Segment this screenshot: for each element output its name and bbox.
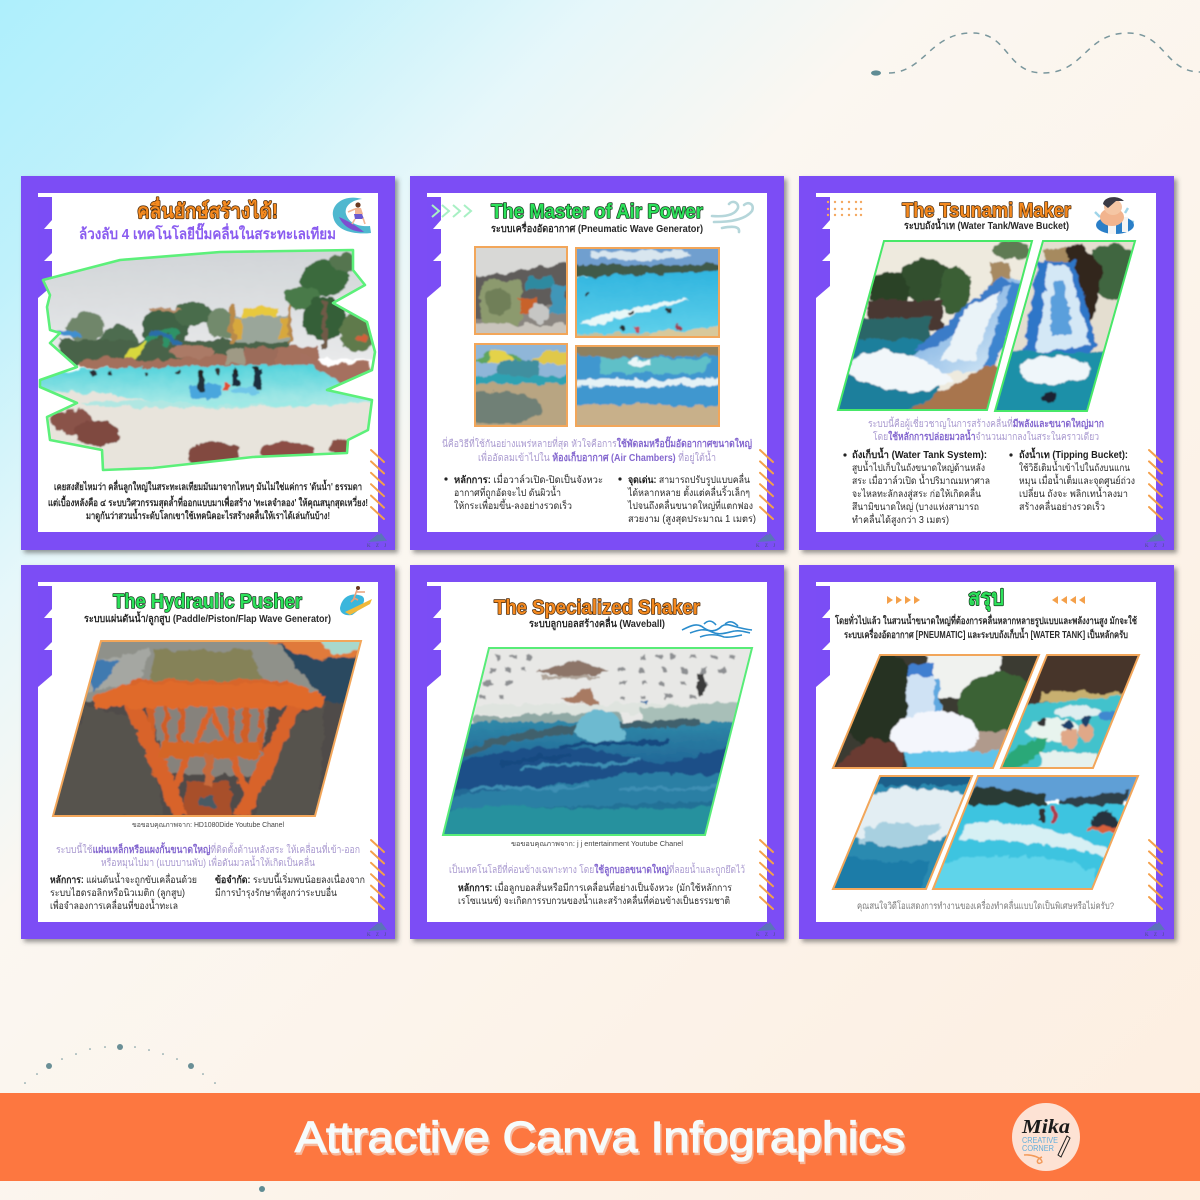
description text: ระบบนี้คือผู้เชี่ยวชาญในการสร้างคลื่นที่มีพลังและขนาดใหญ่มาก	[868, 416, 1104, 430]
dashed wave decoration top right	[871, 33, 1200, 76]
logo: KZJ mark: K Z J	[756, 544, 777, 549]
logo: KZJ mark	[1145, 922, 1166, 938]
bullet: water tank system: สึนามิขนาดใหญ่ (บางแห่งสามารถ	[852, 501, 979, 513]
bullet: highlight: ได้หลากหลาย ตั้งแต่คลื่นริ้วเล็กๆ	[627, 485, 750, 499]
subheading: ระบบเครื่องอัดอากาศ (Pneumatic Wave Generator)	[491, 221, 703, 235]
icon: blue waves	[682, 621, 752, 637]
subheading: ระบบแผ่นดันน้ำ/ลูกสูบ (Paddle/Piston/Flap Wave Generator)	[84, 611, 331, 626]
text: limitation: มีการบำรุงรักษาที่สูงกว่าระบบอื่น	[215, 886, 337, 899]
logo: Mika Creative Corner: Mika	[1021, 1116, 1070, 1138]
intro paragraph: แต่เบื้องหลังคือ ๔ ระบบวิศวกรรมสุดล้ำที่ออกแบบมาเพื่อสร้าง 'ทะเลจำลอง' ให้คุณสนุกสุดเหวี่ยง!	[48, 495, 368, 509]
text: principle	[50, 872, 197, 912]
panel: specialized shaker	[410, 565, 784, 939]
heading: giant waves title: คลื่นยักษ์สร้างได้!	[137, 196, 278, 223]
bullet: highlight: สวยงาม (สูงสุดประมาณ 1 เมตร)	[628, 514, 756, 525]
text: principle: หลักการ: เมื่อลูกบอลสั่นหรือมีการเคลื่อนที่อย่างเป็นจังหวะ (มักใช้หลักการ	[458, 881, 732, 894]
bullet: tipping bucket: ถังน้ำเท (Tipping Bucket):	[1019, 447, 1128, 461]
image credit: ขอขอบคุณภาพจาก: j j entertainment Youtube Chanel	[511, 841, 683, 848]
bullet: water tank system: สระ เมื่อวาล์วเปิด น้ำปริมาณมหาศาล	[852, 473, 990, 487]
bullet: tipping bucket	[1009, 447, 1135, 513]
dotted arc decoration	[24, 1044, 216, 1084]
photo: wave ball pool	[442, 647, 754, 836]
photo: right wave bucket slide	[990, 235, 1140, 416]
bullet: water tank system	[843, 447, 990, 526]
logo: KZJ mark: K Z J	[367, 933, 388, 938]
bullet: water tank system: ถังเก็บน้ำ (Water Tank System):	[852, 447, 987, 461]
panel: air power	[410, 176, 784, 550]
panel: intro	[21, 176, 395, 550]
bullet: water tank system: สูบน้ำไปเก็บในถังขนาดใหญ่ด้านหลัง	[852, 460, 985, 474]
summary text	[834, 613, 1137, 641]
bullet: tipping bucket: หมุน เมื่อน้ำเต็มและจุดศูนย์ถ่วง	[1019, 473, 1135, 487]
bullet: water tank system: ทำคลื่นได้สูงกว่า 3 เมตร)	[852, 513, 949, 526]
photo: blower machinery	[474, 246, 568, 335]
text: principle: ระบบไฮดรอลิกหรือนิวเมติก (ลูกสูบ)	[50, 887, 185, 899]
description text	[868, 416, 1104, 443]
bullet: highlight: จุดเด่น: สามารถปรับรูปแบบคลื่น	[628, 473, 750, 486]
photo: bubbling pump pit	[474, 343, 568, 427]
photo: waterfall bucket	[832, 654, 1040, 769]
description text: เป็นเทคโนโลยีที่ค่อนข้างเฉพาะทาง โดยใช้ลูกบอลขนาดใหญ่ที่ลอยน้ำและถูกยึดไว้	[449, 862, 745, 877]
panel: summary	[799, 565, 1174, 939]
panel: hydraulic pusher	[21, 565, 395, 939]
logo: KZJ mark	[756, 922, 777, 938]
intro paragraph: เคยสงสัยไหมว่า คลื่นลูกใหญ่ในสระทะเลเทียมมันมาจากไหนๆ มันไม่ใช่แค่การ 'ดันน้ำ' ธรรมดา	[54, 479, 362, 494]
logo: KZJ mark	[367, 533, 388, 549]
icon: wind	[712, 202, 753, 232]
photo: wave pool with bather	[932, 775, 1140, 890]
logo: KZJ mark: K Z J	[756, 933, 777, 938]
description text: นี่คือวิธีที่ใช้กันอย่างแพร่หลายที่สุด หัวใจคือการใช้พัดลมหรือปั๊มอัดอากาศขนาดใหญ่	[442, 436, 752, 450]
heading: The Specialized Shaker	[494, 597, 700, 619]
description text	[56, 842, 360, 869]
logo: KZJ mark: K Z J	[367, 544, 388, 549]
bullet: tipping bucket: สร้างคลื่นอย่างรวดเร็ว	[1019, 500, 1105, 513]
description text: โดยใช้หลักการปล่อยมวลน้ำจำนวนมากลงในสระในคราวเดียว	[873, 429, 1099, 443]
logo: KZJ mark	[756, 533, 777, 549]
logo: Mika Creative Corner	[1012, 1103, 1080, 1171]
logo: KZJ mark: K Z J	[1145, 544, 1166, 549]
heading: The Master of Air Power	[491, 201, 703, 223]
logo: Mika Creative Corner: CORNER	[1022, 1144, 1054, 1153]
heading: The Hydraulic Pusher	[113, 591, 302, 613]
icon: chevrons	[432, 205, 471, 217]
intro paragraph: มาดูกันว่าสวนน้ำระดับโลกเขาใช้เทคนิคอะไรสร้างคลื่นให้เราได้เล่นกันบ้าง!	[86, 508, 330, 523]
photo: wave pool park with green torn border	[30, 240, 385, 475]
text: limitation	[215, 872, 365, 899]
description text: ระบบนี้ใช้แผ่นเหล็กหรือแผงกั้นขนาดใหญ่ที่ติดตั้งด้านหลังสระ ให้เคลื่อนที่เข้า-ออก	[56, 842, 360, 856]
photo: surfing pool	[575, 345, 720, 427]
bullet: highlight	[618, 473, 756, 525]
text: principle: เพื่อจำลองการเคลื่อนที่ของน้ำทะเล	[50, 898, 178, 912]
subheading: ล้วงลับ 4 เทคโนโลยีปั๊มคลื่นในสระทะเลเทียม	[79, 222, 336, 243]
panel: tsunami maker	[799, 176, 1174, 550]
bullet: principle	[444, 473, 603, 512]
text: principle: เรโซแนนซ์) จะเกิดการรบกวนของน้ำและสร้างคลื่นที่ค่อนข้างเป็นธรรมชาติ	[458, 893, 730, 907]
bullet: tipping bucket: เปลี่ยน ถังจะ พลิกเทน้ำลงมา	[1019, 486, 1128, 500]
subheading: ระบบลูกบอลสร้างคลื่น (Waveball)	[529, 616, 665, 631]
closing question: คุณสนใจวิดีโอแสดงการทำงานของเครื่องทำคลื่นแบบใดเป็นพิเศษหรือไม่ครับ?	[857, 899, 1114, 912]
text: limitation: ข้อจำกัด: ระบบนี้เริ่มพบน้อยลงเนื่องจาก	[215, 872, 365, 886]
heading: สรุป	[968, 585, 1004, 612]
text: principle: หลักการ: แผ่นดันน้ำจะถูกขับเคลื่อนด้วย	[50, 872, 197, 886]
photo: foaming water	[832, 775, 974, 890]
photo: swimmers in rings	[1000, 654, 1140, 769]
icon: surfer on wave	[333, 198, 371, 233]
logo: KZJ mark	[367, 922, 388, 938]
image credit: ขอขอบคุณภาพจาก: HD1080Dide Youtube Chanel	[132, 822, 284, 829]
logo: KZJ mark: K Z J	[1145, 933, 1166, 938]
description text: เพื่ออัดลมเข้าไปใน ห้องเก็บอากาศ (Air Chambers) ที่อยู่ใต้น้ำ	[478, 450, 716, 464]
logo: KZJ mark	[1145, 533, 1166, 549]
description text: หรือหมุนไปมา (แบบบานพับ) เพื่อดันมวลน้ำให้เกิดเป็นคลื่น	[101, 855, 315, 869]
bullet: tipping bucket: ใช้วิธีเติมน้ำเข้าไปในถังบนแกน	[1019, 460, 1130, 474]
bullet: principle: อากาศที่ถูกอัดจะไป ดันผิวน้ำ	[454, 485, 561, 499]
icon: dot grid	[827, 201, 862, 216]
subheading: ระบบถังน้ำเท (Water Tank/Wave Bucket)	[904, 218, 1069, 232]
footer band	[0, 1093, 1200, 1181]
bullet: principle: ให้กระเพื่อมขึ้น-ลงอย่างรวดเร็ว	[454, 498, 572, 512]
intro paragraph	[48, 479, 368, 523]
bullet: principle: หลักการ: เมื่อวาล์วเปิด-ปิดเป็นจังหวะ	[454, 473, 603, 486]
bullet: water tank system: จะไหลทะลักลงสู่สระ ก่อให้เกิดคลื่น	[852, 487, 981, 500]
photo: orange paddle machine	[52, 640, 362, 817]
photo: pool with swimmers	[575, 247, 720, 338]
icon: surfer	[340, 586, 372, 615]
photo: left wave bucket slide	[836, 240, 1034, 411]
bullet: highlight: ไปจนถึงคลื่นขนาดใหญ่ที่แตกฟอง	[627, 499, 753, 512]
footer title: Attractive Canva Infographics	[295, 1113, 905, 1162]
icon: boy in swim ring	[1095, 197, 1134, 234]
stray dot	[259, 1186, 265, 1192]
icon: right arrows	[1052, 596, 1085, 604]
heading: The Tsunami Maker	[902, 200, 1071, 222]
text: principle	[458, 881, 732, 907]
logo: Mika Creative Corner: CREATIVE	[1022, 1136, 1058, 1145]
description text	[442, 436, 752, 464]
icon: left arrows	[887, 596, 920, 604]
